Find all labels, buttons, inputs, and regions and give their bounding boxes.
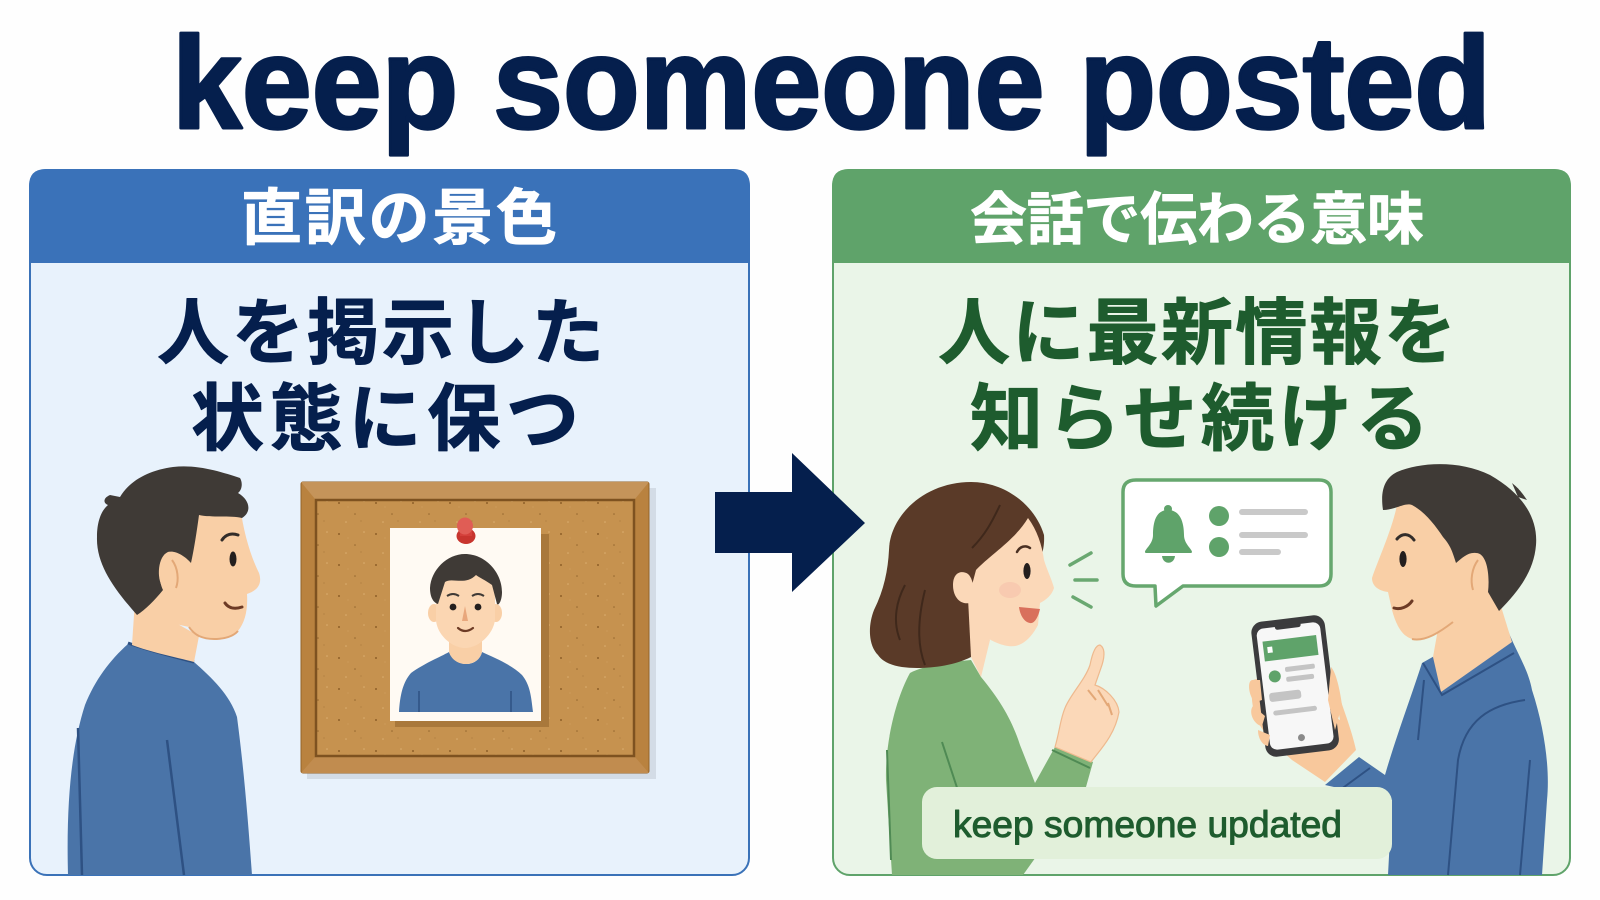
literal meaning line 2: 状態に保つ [191,379,579,460]
meaning line 2: 知らせ続ける [970,379,1429,460]
heading: literal scene: 直訳の景色 [241,184,557,252]
speech bubble with notification [1123,480,1331,606]
panel: literal scene [29,169,750,875]
illustration: cork board [301,482,656,779]
panel header: literal [29,169,750,263]
photo pinned to the board [390,528,541,721]
hand pointing up [1055,645,1119,762]
thumb and fingers [1249,667,1342,746]
panel header: meaning [832,169,1571,263]
icon: speech marks [1070,553,1097,607]
illustration: man holding a phone [1249,464,1548,875]
illustration: man seen from the side [68,466,260,875]
icon: red push pin [456,518,476,544]
illustration: woman speaking [870,482,1119,875]
literal meaning line 1: 人を掲示した [157,294,604,374]
hand holding phone [1252,678,1356,782]
notification list [1209,506,1308,557]
label: keep someone updated [922,787,1392,859]
heading: meaning in conversation: 会話で伝わる意味 [970,188,1424,252]
icon: bell [1145,505,1192,563]
phone [1250,614,1340,758]
meaning line 1: 人に最新情報を [938,294,1456,374]
title: keep someone posted [172,9,1491,156]
panel: conversational meaning [832,169,1571,875]
label: keep someone updated: keep someone updated [953,804,1342,845]
arrow [715,453,865,592]
